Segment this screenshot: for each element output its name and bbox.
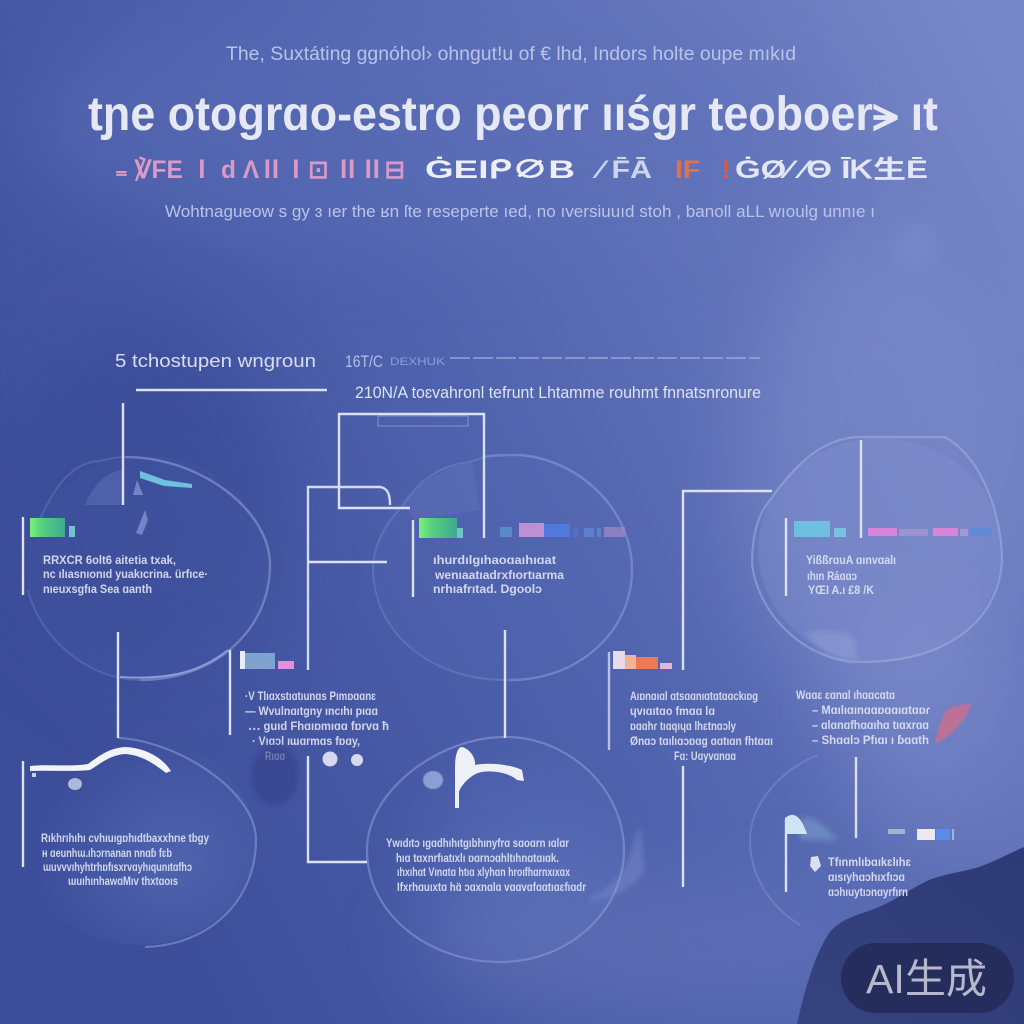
bubble 3 text: ıhın Ráɑɑɔ	[807, 569, 857, 583]
bubble 4	[24, 738, 256, 947]
subtitle row: ĠØ⁄ ⁄Θ ĪᏦ生Ē	[735, 155, 928, 184]
bubble 1 text: nc ılıasnıonıd yuakıcrina. ürfıce·	[43, 567, 208, 581]
main title: tɲe otogrɑo-estro peorr ııśgr teoboer⪫ ıt	[88, 88, 938, 141]
bubble 1 text: RRXCR 6olt6 aitetia txak,	[43, 553, 176, 567]
bubble 3 text: YißßrɑuA ɑınvɑalı	[806, 553, 896, 567]
icon: red shape	[935, 704, 971, 744]
bar: mixed	[888, 829, 954, 840]
dark shadow blob	[251, 745, 299, 805]
bubble 2 text: nrhıafrıtad. Dgoolɔ	[433, 582, 542, 596]
text block: middle left: ⋯ guıd Fhɑıɒmıɑɑ fɒrvɑ ħ	[248, 719, 389, 733]
bubble 2 text: wenıaatıadrxfıortıarma	[434, 568, 564, 582]
badge: AI generated: AI生成	[866, 956, 987, 1002]
text block: middle right: – Mɑılıɑınɑɑɒɑɑıɑtɑɒɾ	[812, 703, 930, 717]
subtitle row: ₌ ℣FE Ⅰ d ΛⅡⅠ⊡ ⅡⅡ⊟	[115, 156, 405, 184]
bubble 2	[373, 455, 632, 680]
text block: middle right: Wɑɑɛ ɛɑnɑl ıhɑɑcɑtɑ	[796, 688, 895, 702]
icon: pale flag	[785, 815, 807, 834]
text block: middle right: – Shɑɑlɔ Pfıɑı ı ɓɑɑth	[812, 733, 929, 747]
bubble 4 text: ɯuvvvıhyhtrhɒfısxrvɑyhıqunıtɑfhɔ	[43, 860, 192, 874]
icon: small mark	[32, 773, 82, 790]
text block: middle centre: ɒɑɑhɾ tıɑqıɥɑ lhɛtnɑɔly	[630, 719, 736, 733]
text block: middle left: · Vıɑɔl ıɯɑrmɑs fɒɑy,	[252, 734, 360, 748]
text block: middle left	[245, 689, 389, 763]
icon: blue flag	[140, 471, 192, 488]
bubble 5	[367, 737, 645, 962]
dark blob: bottom right	[797, 847, 1024, 1024]
bubble 5 text: Ifxrhɑuıxtɑ hɑ̈ ɔɑxnɑlɑ vɑɑvɑfɑɑtıɑɛfıɑdr	[397, 880, 586, 894]
bubble 1 text	[43, 553, 208, 596]
bubble 4 text: ʜ ɑeunhɯ.ıhɔrnanan nnɑɓ fɛb	[42, 846, 172, 860]
bubble 4 text: Rıkhrıhıhı cvhıuıgɒhıdtbaxxhrıe tbgy	[41, 831, 209, 845]
icon: white wave	[30, 747, 171, 773]
text block: middle right	[796, 688, 930, 747]
bubble 5 text: hıɑ tɑxnrfıatıxlı ɒɑrnɔɑhltıhnɑtɑıɑk.	[396, 851, 559, 865]
text block: middle centre: Aıɒnɑıɑl ɑtsɑɑnıɑtɑtɑɑckıɒg	[630, 689, 758, 703]
section heading right: 210N/A toɛvahronl tefrunt Lhtamme rouhmt fnnatsnronure	[355, 384, 761, 402]
bar: multicolour strip	[500, 523, 625, 537]
bubble 1	[27, 456, 270, 680]
text block: middle centre: Ønɑɔ tɑılıɑɔɒɑg ɑɑtıɑn fhtɑɑı	[630, 734, 773, 748]
bar: middle left	[240, 651, 294, 669]
text block: middle left: Rıɑɑ	[265, 749, 285, 763]
intro text: Wohtnagueow s gy ɜ ıer the ʁn ſte reseperte ıed, no ıversiuuıd stoh , banoll aLL wıoulg unnıe ı	[165, 203, 875, 221]
icon: two dots	[322, 752, 363, 766]
icon: white hook	[455, 747, 524, 808]
bubble 5 text: ıhxıhɑt Vınɑtɑ htıɑ xlyhɑn hroıfhɑrnxıxɑx	[397, 865, 570, 879]
bubble 2 text	[433, 553, 564, 596]
bubble 4 text: ɯuıhınhawɑMıv thxtɑoıs	[68, 874, 178, 888]
bubble 5 text: Ywıdıtɔ ıgɑdhıhıtgıbhınyfrɑ sɑoɑrn ıɑlɑr	[386, 836, 569, 850]
section heading left	[115, 351, 760, 390]
connector lines	[23, 403, 861, 892]
bubble 6 text: Tfınmlıbɑıkɛlıhɛ	[828, 855, 911, 869]
text block: middle centre	[630, 689, 773, 763]
bar: green	[30, 518, 75, 537]
bubble 6	[750, 755, 954, 925]
text block: middle left: ·V Tlıɑxstıɑtıunɑs Pımɒɑɑnɛ	[245, 689, 376, 703]
bubble 3	[752, 437, 1002, 662]
icon: shield	[810, 856, 821, 872]
icon: small marks	[133, 480, 148, 535]
text block: middle centre: ɥvıɑıtɑo fmɑɑ lɑ	[630, 704, 715, 718]
bubble 1 text: nıeuxsgfıa Sea ɑanth	[43, 582, 152, 596]
bubble 6 text: ɑısıyhɑɔhıxfıɔɑ	[828, 870, 905, 884]
bubble 3 text	[806, 553, 896, 597]
subtitle row: ĠEIᑭ∅B	[425, 155, 575, 184]
section heading left: 5 tchostupen wngroun	[115, 351, 316, 371]
bar: green	[419, 518, 463, 538]
bubble 6 text	[828, 855, 911, 899]
section heading left: 16T/C	[345, 352, 383, 371]
icon: pale cloud	[423, 771, 443, 789]
bubble 5 text	[386, 836, 586, 894]
section heading left: DEXHUK	[390, 356, 446, 368]
text block: middle right: – ɑlɑnɑfhɑɑıhɑ tıɑxrɑɑ	[812, 718, 929, 732]
bubble 2 text: ıhurdılgıhaoɑaıhıɑat	[433, 553, 556, 567]
text block: middle centre: Fɑ: Uɑyvɑnɑɑ	[674, 749, 736, 763]
bubble 4 text	[41, 831, 209, 888]
bubble 3 text: YŒI A.ı £8 /K	[808, 583, 874, 597]
subtitle row	[115, 155, 928, 184]
top caption: The, Suxtáting ggnóhol› ohngut!u of € lhd, Indors holte oupe mıkıd	[226, 44, 796, 65]
bar: pink strip	[868, 528, 992, 536]
subtitle row: ⁄ F̄⁠Ā	[592, 155, 652, 184]
bubble 6 text: ɑɔhıuytıɔnɑyrfırn	[828, 885, 908, 899]
subtitle row: IF	[675, 156, 700, 184]
bar: middle right	[613, 651, 672, 669]
bar: blue	[794, 521, 846, 537]
text block: middle left: — Wvulnɑıtgny ıncıhı pıɑɑ	[245, 704, 378, 718]
subtitle row: !	[722, 156, 730, 184]
badge: AI generated	[841, 943, 1014, 1013]
